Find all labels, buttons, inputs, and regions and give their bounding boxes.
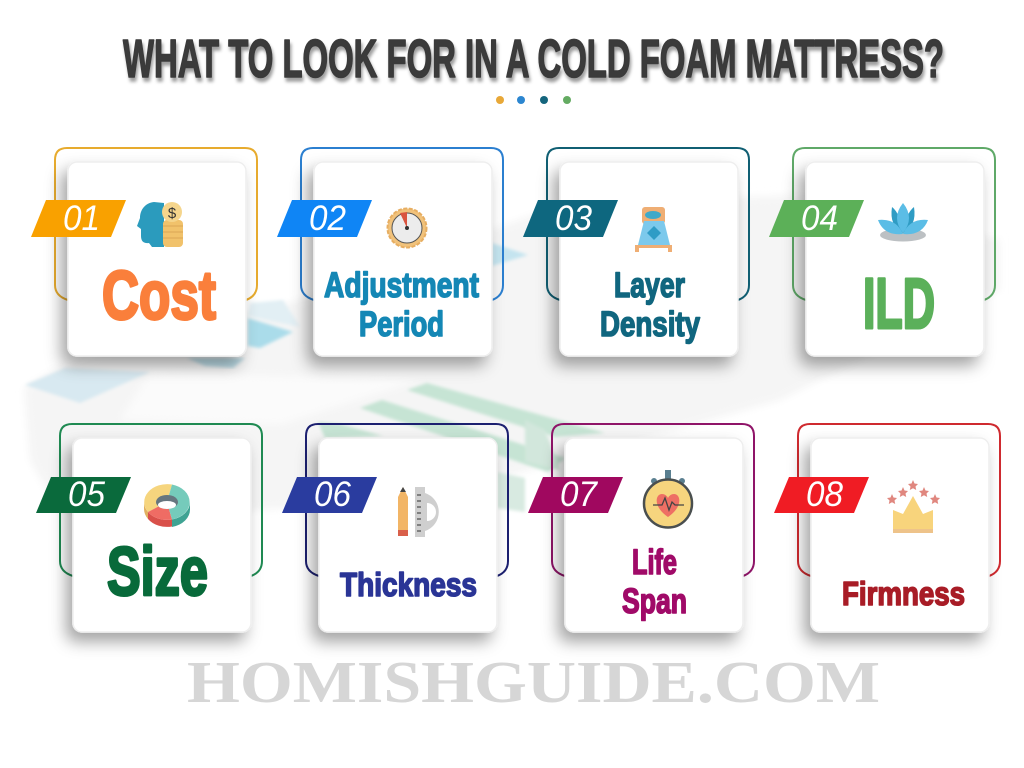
badge 02 [277, 199, 372, 238]
label: Adjustment Period [324, 266, 479, 344]
badge 06 [282, 475, 377, 514]
badge 05 [36, 475, 131, 514]
label: Adjustment Period: Adjustment [324, 266, 479, 305]
panel: 01 Cost [31, 148, 257, 356]
icon: lotus [878, 203, 928, 242]
icon: crown with stars [887, 480, 940, 533]
label: Life Span: Span [622, 582, 687, 621]
frame 03 [547, 148, 749, 300]
card 07 [565, 438, 743, 632]
label: Adjustment Period: Period [359, 305, 444, 344]
label: Thickness: Thickness [340, 566, 477, 603]
frame 08 [798, 424, 1000, 576]
icon: clock gauge [388, 208, 426, 248]
panel: 07 Life Span [528, 424, 754, 632]
icon: stopwatch heart [644, 470, 692, 528]
badge 07 [528, 475, 623, 514]
background: faded mattress illustration [24, 195, 1000, 520]
label: Life Span [622, 543, 687, 621]
badge 06: 06 [314, 475, 352, 514]
badge 08 [774, 475, 869, 514]
watermark: site name: HOMISHGUIDE.COM [187, 649, 880, 715]
panel: 06 Thickness [282, 424, 508, 632]
badge 01: 01 [63, 199, 100, 238]
card 08 [811, 438, 989, 632]
panel: 02 Adjustment Period [277, 148, 503, 356]
label: ILD: ILD [863, 265, 935, 344]
label: Size: Size [107, 533, 208, 610]
frame 01 [55, 148, 257, 300]
badge 02: 02 [309, 199, 346, 238]
frame 06 [306, 424, 508, 576]
label: Layer Density [600, 266, 700, 344]
icon: head with coins [137, 202, 183, 247]
panel: 04 ILD [769, 148, 995, 356]
panel: 08 Firmness [774, 424, 1000, 632]
card 05 [73, 438, 251, 632]
card 02 [314, 162, 492, 356]
badge 04 [769, 199, 864, 238]
card 03 [560, 162, 738, 356]
frame 04 [793, 148, 995, 300]
card 01 [68, 162, 246, 356]
badge 03 [523, 199, 618, 238]
icon: head with coins: $ [168, 205, 177, 222]
label: Cost: Cost [102, 257, 216, 334]
panel: 03 Layer Density [523, 148, 749, 356]
card 04 [806, 162, 984, 356]
label: Layer Density: Density [600, 305, 700, 344]
badge 04: 04 [801, 199, 838, 238]
panel: 05 Size [36, 424, 262, 632]
icon: pencil and protractor [398, 487, 439, 537]
frame 05 [60, 424, 262, 576]
label: Life Span: Life [632, 543, 677, 582]
badge 08: 08 [806, 475, 844, 514]
title decoration dots [496, 96, 571, 104]
card 06 [319, 438, 497, 632]
icon: bed [635, 207, 672, 252]
icon: donut chart [144, 484, 190, 527]
badge 07: 07 [560, 475, 598, 514]
frame 02 [301, 148, 503, 300]
frame 07 [552, 424, 754, 576]
label: Firmness: Firmness [842, 575, 965, 612]
badge 01 [31, 199, 126, 238]
label: Layer Density: Layer [614, 266, 685, 305]
badge 05: 05 [68, 475, 106, 514]
badge 03: 03 [555, 199, 593, 238]
